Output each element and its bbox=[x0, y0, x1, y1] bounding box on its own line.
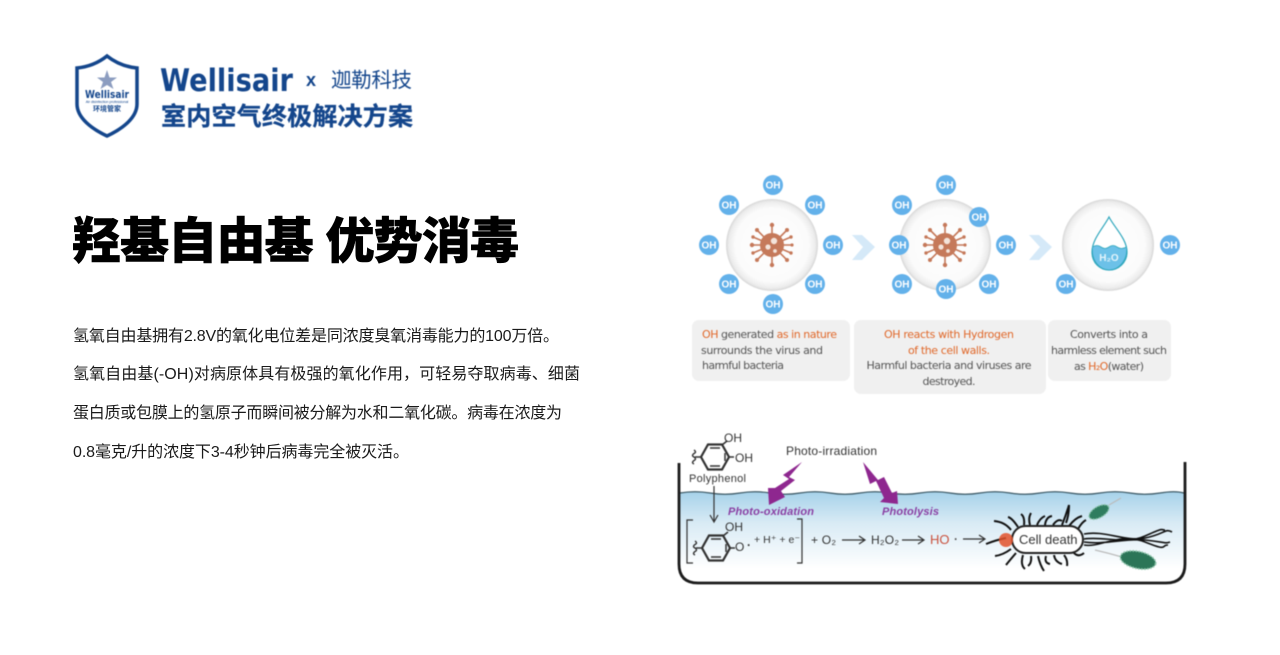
cross mark: x bbox=[306, 70, 316, 90]
body text: 氢氧自由基(-OH)对病原体具有极强的氧化作用，可轻易夺取病毒、细菌 bbox=[73, 365, 580, 383]
caption 3: as H₂O(water) bbox=[1074, 360, 1144, 373]
reaction equation: · bbox=[954, 532, 958, 546]
arrow: lightning bolt 2 bbox=[863, 462, 898, 504]
stage 3: water drop bbox=[1056, 199, 1180, 294]
caption 2: destroyed. bbox=[922, 375, 976, 388]
diagram: photo-irradiation tank bbox=[679, 431, 1185, 583]
bacterium: small green top bbox=[1087, 498, 1121, 522]
stage 2: OH reacts with virus bbox=[889, 175, 1016, 299]
brand name: Wellisair bbox=[160, 63, 294, 99]
reaction equation: + O₂ bbox=[811, 533, 836, 547]
body text bbox=[73, 327, 580, 461]
reaction equation: O bbox=[735, 540, 744, 554]
caption 3 bbox=[1048, 320, 1171, 381]
stage 1: OH surrounds virus bbox=[699, 175, 843, 314]
tank outline bbox=[679, 462, 1185, 583]
reaction equation: · bbox=[747, 538, 751, 552]
icon: shield badge bbox=[77, 56, 137, 136]
caption 2: of the cell walls. bbox=[908, 344, 990, 357]
water surface bbox=[680, 492, 1184, 494]
partner name: 迦勒科技 bbox=[331, 69, 412, 92]
bacterium: small green bottom bbox=[1095, 548, 1157, 572]
reaction equation: OH bbox=[725, 520, 743, 534]
icon: shield badge: Wellisair bbox=[85, 89, 130, 101]
tagline: 室内空气终极解决方案 bbox=[161, 102, 413, 131]
caption 1: surrounds the virus and bbox=[701, 344, 823, 357]
reaction equation: H₂O₂ bbox=[871, 533, 899, 547]
caption 1: harmful bacteria bbox=[702, 359, 784, 372]
reaction equation: HO bbox=[930, 532, 950, 547]
bacterium: cell death: Cell death bbox=[1019, 532, 1078, 547]
arrow: chevron 1 bbox=[852, 235, 875, 260]
stage 3: water drop: H₂O bbox=[1099, 253, 1119, 264]
caption 3: Converts into a bbox=[1070, 328, 1148, 341]
polyphenol molecule: Polyphenol bbox=[689, 473, 746, 485]
polyphenol molecule bbox=[689, 431, 753, 485]
arrow: lightning bolt 1 bbox=[768, 462, 802, 505]
title: 羟基自由基 优势消毒 bbox=[72, 215, 519, 269]
reaction equation bbox=[687, 519, 985, 563]
caption 3: harmless element such bbox=[1051, 344, 1167, 357]
body text: 氢氧自由基拥有2.8V的氧化电位差是同浓度臭氧消毒能力的100万倍。 bbox=[73, 327, 559, 345]
arrow: polyphenol down bbox=[710, 486, 718, 522]
label: photo-irradiation: Photo-irradiation bbox=[786, 444, 877, 458]
label: photolysis: Photolysis bbox=[882, 506, 939, 518]
caption 2 bbox=[854, 320, 1046, 394]
body text: 0.8毫克/升的浓度下3-4秒钟后病毒完全被灭活。 bbox=[73, 442, 409, 461]
bacterium: cell death bbox=[986, 505, 1172, 571]
logo: shield and brand text bbox=[77, 56, 413, 136]
icon: shield badge: 环境管家 bbox=[93, 104, 121, 113]
arrow: chevron 2 bbox=[1029, 235, 1052, 260]
caption 2: OH reacts with Hydrogen bbox=[884, 328, 1014, 341]
polyphenol molecule: OH bbox=[735, 451, 753, 465]
polyphenol molecule: OH bbox=[724, 431, 742, 445]
body text: 蛋白质或包膜上的氢原子而瞬间被分解为水和二氧化碳。病毒在浓度为 bbox=[73, 404, 562, 422]
water bbox=[680, 492, 1184, 582]
caption 1 bbox=[692, 320, 850, 381]
diagram: OH reaction stages bbox=[692, 175, 1180, 394]
label: photo-oxidation: Photo-oxidation bbox=[728, 506, 814, 518]
caption 1: OH generated as in nature bbox=[702, 328, 837, 341]
reaction equation: + H⁺ + e⁻ bbox=[754, 534, 800, 546]
icon: shield badge: Air disinfection professional bbox=[86, 100, 129, 104]
caption 2: Harmful bacteria and viruses are bbox=[866, 359, 1032, 372]
